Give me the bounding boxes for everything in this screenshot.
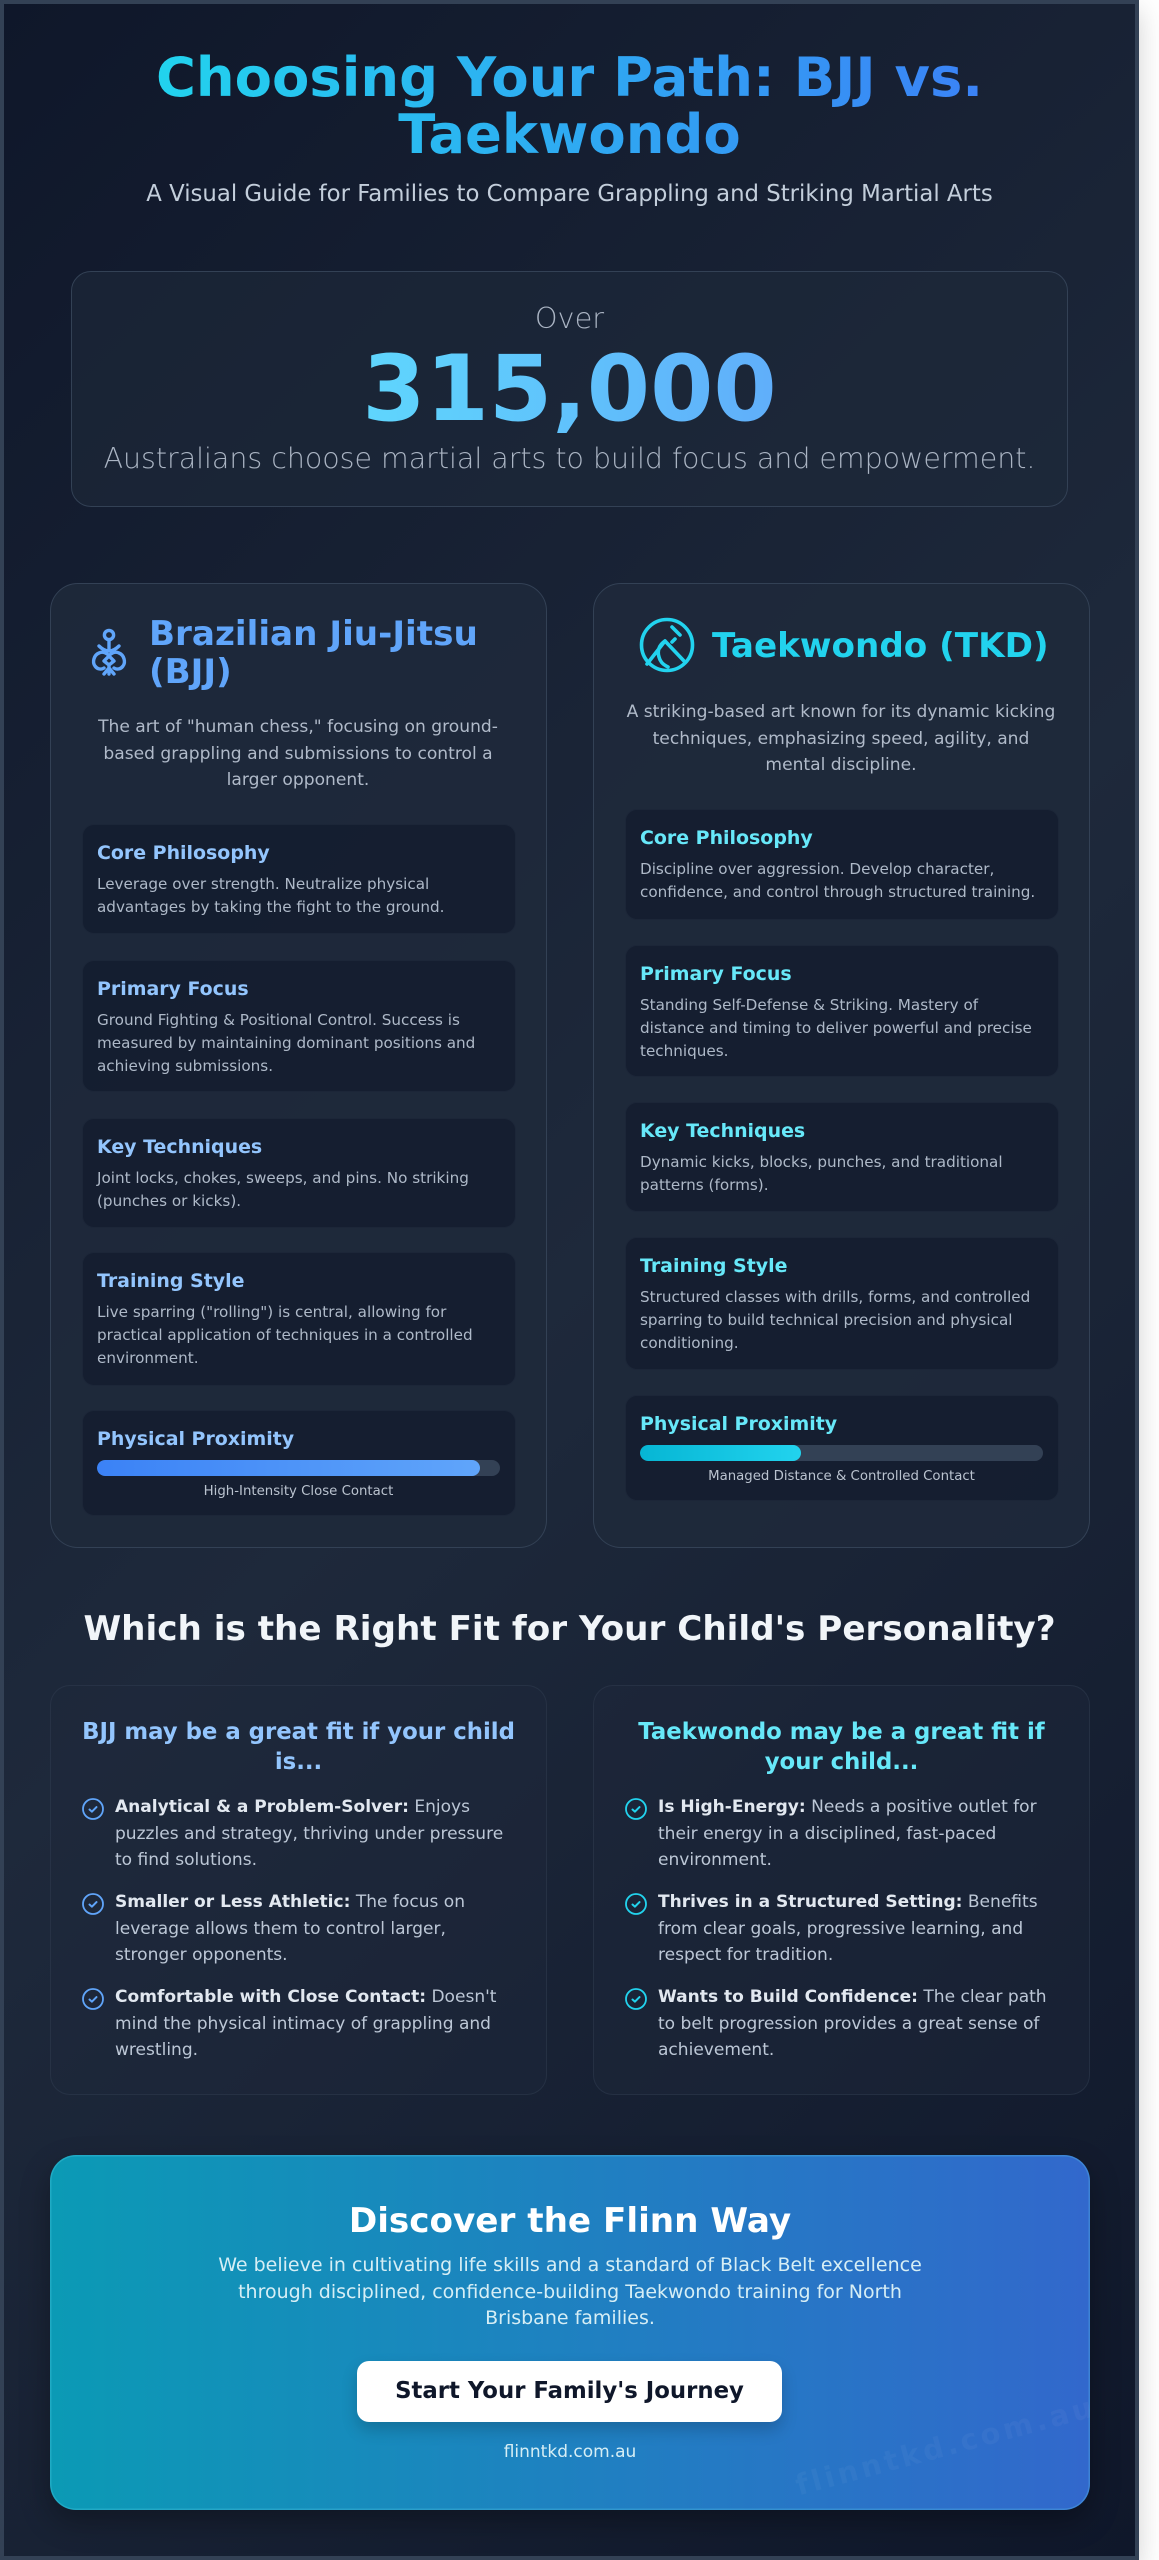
- fit item: high energy: their energy in a disciplined, fast-paced: [658, 1824, 996, 1844]
- CTA button: [357, 2361, 782, 2422]
- row: training style: Training Style: [97, 1270, 244, 1292]
- icon: BJJ knot: [92, 628, 126, 676]
- panel description: based grappling and submissions to control a: [103, 744, 493, 764]
- CTA heading: Discover the Flinn Way: [349, 2201, 791, 2241]
- row: core philosophy: Core Philosophy: [640, 826, 813, 848]
- fit item: confidence: Wants to Build Confidence: The clear path: [658, 1987, 1047, 2007]
- fit item: close contact: mind the physical intimacy of grappling and: [115, 2014, 491, 2034]
- panel heading: [149, 614, 478, 692]
- fit item: close contact: wrestling.: [115, 2040, 198, 2060]
- icon: TKD kick: [640, 618, 694, 672]
- fit item: close contact: Comfortable with Close Contact: Doesn't: [115, 1987, 496, 2007]
- row: training style: Live sparring ("rolling") is central, allowing for: [97, 1302, 446, 1320]
- panel heading: Brazilian Jiu-Jitsu: [149, 614, 478, 654]
- panel description: [626, 702, 1055, 775]
- row: primary focus: [624, 944, 1058, 1076]
- row: primary focus: achieving submissions.: [97, 1056, 273, 1074]
- row: key techniques: Key Techniques: [640, 1120, 805, 1142]
- row: core philosophy: [82, 824, 516, 934]
- row: core philosophy: [624, 808, 1058, 920]
- fit heading: [638, 1719, 1045, 1775]
- title: [156, 46, 983, 166]
- panel description: techniques, emphasizing speed, agility, and: [653, 729, 1029, 749]
- row: key techniques: patterns (forms).: [640, 1176, 769, 1194]
- fit item: structured: from clear goals, progressive learning, and: [658, 1919, 1023, 1939]
- stat caption: Australians choose martial arts to build focus and empowerment.: [104, 442, 1035, 475]
- row: key techniques: Key Techniques: [97, 1136, 262, 1158]
- fit item: high energy: environment.: [658, 1850, 772, 1870]
- row: primary focus: distance and timing to deliver powerful and precise: [640, 1018, 1032, 1036]
- row: primary focus: Standing Self-Defense & Striking. Mastery of: [640, 996, 978, 1014]
- fit item: high energy: [625, 1797, 1037, 1870]
- stat panel: [71, 271, 1068, 507]
- row: training style: [624, 1236, 1058, 1370]
- title: Choosing Your Path: BJJ vs.: [156, 46, 983, 109]
- fit item: close contact: [82, 1987, 496, 2060]
- row: training style: environment.: [97, 1348, 199, 1366]
- panel: BJJ fit: [50, 1685, 547, 2095]
- row: core philosophy: confidence, and control through structured training.: [640, 882, 1035, 900]
- fit item: smaller: leverage allows them to control larger,: [115, 1919, 446, 1939]
- row: physical proximity meter: High-Intensity Close Contact: [204, 1484, 393, 1498]
- panel description: The art of "human chess," focusing on ground-: [98, 717, 498, 737]
- row: key techniques: Joint locks, chokes, sweeps, and pins. No striking: [97, 1168, 469, 1186]
- row: physical proximity meter: Managed Distance & Controlled Contact: [708, 1468, 975, 1484]
- fit item: smaller: stronger opponents.: [115, 1945, 288, 1965]
- row: key techniques: [624, 1102, 1058, 1212]
- row: primary focus: Ground Fighting & Positional Control. Success is: [97, 1010, 460, 1028]
- fit item: confidence: [625, 1987, 1047, 2060]
- row: primary focus: Primary Focus: [97, 978, 249, 1000]
- stat lead-in: Over: [535, 301, 604, 335]
- row: key techniques: [82, 1118, 516, 1228]
- CTA text: We believe in cultivating life skills and a standard of Black Belt excellence: [218, 2254, 922, 2276]
- fit item: smaller: [82, 1892, 465, 1965]
- row: training style: conditioning.: [640, 1334, 739, 1352]
- row: primary focus: measured by maintaining dominant positions and: [97, 1034, 475, 1052]
- row: training style: sparring to build technical precision and physical: [640, 1310, 1012, 1328]
- fit item: analytical: puzzles and strategy, thriving under pressure: [115, 1824, 503, 1844]
- fit item: high energy: Is High-Energy: Needs a positive outlet for: [658, 1797, 1037, 1817]
- row: training style: Structured classes with drills, forms, and controlled: [640, 1288, 1030, 1306]
- fit item: analytical: Analytical & a Problem-Solver: Enjoys: [115, 1797, 470, 1817]
- fit item: structured: respect for tradition.: [658, 1945, 833, 1965]
- fit item: structured: [625, 1892, 1038, 1965]
- row: primary focus: techniques.: [640, 1042, 728, 1060]
- row: training style: [82, 1252, 516, 1386]
- row: core philosophy: Core Philosophy: [97, 842, 270, 864]
- CTA button: Start Your Family's Journey: [395, 2378, 744, 2404]
- fit heading: BJJ may be a great fit if your child: [82, 1719, 515, 1745]
- fit item: confidence: achievement.: [658, 2040, 774, 2060]
- stat number: 315,000: [362, 337, 777, 442]
- row: primary focus: [82, 960, 516, 1092]
- title: Taekwondo: [398, 103, 741, 166]
- panel description: [98, 717, 498, 790]
- row: core philosophy: advantages by taking the fight to the ground.: [97, 898, 444, 916]
- row: key techniques: Dynamic kicks, blocks, punches, and traditional: [640, 1152, 1003, 1170]
- panel: Brazilian Jiu-Jitsu: [50, 583, 547, 1548]
- fit item: smaller: Smaller or Less Athletic: The focus on: [115, 1892, 465, 1912]
- fit item: confidence: to belt progression provides a great sense of: [658, 2014, 1039, 2034]
- row: training style: practical application of techniques in a controlled: [97, 1326, 473, 1344]
- subtitle: A Visual Guide for Families to Compare Grappling and Striking Martial Arts: [146, 181, 993, 207]
- panel heading: (BJJ): [149, 652, 232, 692]
- row: physical proximity meter: Physical Proximity: [640, 1412, 837, 1434]
- call to action panel: [50, 2155, 1090, 2510]
- fit heading: Taekwondo may be a great fit if: [638, 1719, 1045, 1745]
- fit heading: [82, 1719, 515, 1775]
- fit item: analytical: [82, 1797, 503, 1870]
- row: core philosophy: Leverage over strength. Neutralize physical: [97, 874, 429, 892]
- row: physical proximity meter: [624, 1394, 1058, 1500]
- row: key techniques: (punches or kicks).: [97, 1192, 241, 1210]
- row: physical proximity meter: [82, 1410, 516, 1516]
- panel description: A striking-based art known for its dynamic kicking: [627, 702, 1055, 722]
- CTA text: [218, 2254, 922, 2329]
- panel description: mental discipline.: [765, 755, 917, 775]
- CTA text: Brisbane families.: [485, 2307, 655, 2329]
- CTA text: through disciplined, confidence-building Taekwondo training for North: [238, 2281, 902, 2303]
- row: core philosophy: Discipline over aggression. Develop character,: [640, 860, 994, 878]
- panel: Taekwondo fit: [593, 1685, 1090, 2095]
- fit heading: your child...: [765, 1749, 918, 1775]
- row: training style: Training Style: [640, 1254, 787, 1276]
- section heading: Which is the Right Fit for Your Child's Personality?: [83, 1609, 1056, 1649]
- row: physical proximity meter: Physical Proximity: [97, 1428, 294, 1450]
- row: primary focus: Primary Focus: [640, 962, 792, 984]
- fit item: analytical: to find solutions.: [115, 1850, 257, 1870]
- panel heading: Taekwondo (TKD): [712, 626, 1049, 666]
- fit item: structured: Thrives in a Structured Setting: Benefits: [658, 1892, 1038, 1912]
- fit heading: is...: [275, 1749, 322, 1775]
- panel: Taekwondo: [593, 583, 1090, 1548]
- panel description: larger opponent.: [227, 770, 369, 790]
- website: flinntkd.com.au: [504, 2442, 636, 2462]
